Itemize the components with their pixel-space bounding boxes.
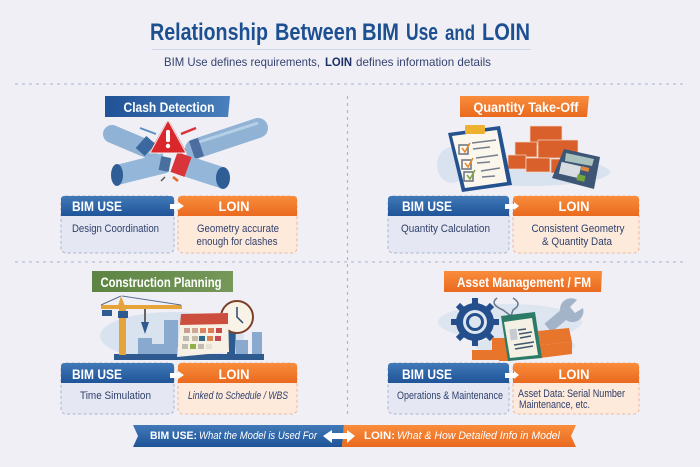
title: and bbox=[445, 22, 475, 45]
panel: asset management bbox=[388, 271, 639, 414]
ribbon: LOIN: LOIN: bbox=[364, 430, 395, 442]
icon: crane, calendar, clock bbox=[100, 296, 264, 360]
bim use card bbox=[388, 363, 509, 414]
icon: gear, tag, wrench, bricks bbox=[438, 298, 583, 361]
panel: quantity take-off bbox=[388, 96, 639, 253]
icon: checklist, bricks, calculator bbox=[437, 125, 610, 192]
double arrow bbox=[323, 430, 355, 443]
arrow bbox=[505, 202, 519, 210]
loin card: Serial Number bbox=[567, 388, 625, 400]
loin card: Linked to Schedule / WBS bbox=[188, 390, 289, 402]
loin card: Geometry accurate bbox=[197, 223, 279, 235]
loin card bbox=[513, 196, 639, 253]
ribbon: BIM USE: What the Model is Used For bbox=[199, 430, 318, 442]
loin card: Maintenance, etc. bbox=[519, 399, 590, 411]
title: Between bbox=[275, 19, 357, 46]
banner: Quantity Take-Off: Quantity Take-Off bbox=[474, 99, 579, 115]
banner: Clash Detection: Clash Detection bbox=[124, 99, 214, 115]
subtitle: LOIN bbox=[325, 55, 352, 69]
bim use card: Time Simulation bbox=[80, 390, 151, 402]
subtitle bbox=[164, 55, 491, 69]
title: Use bbox=[406, 19, 438, 46]
loin card: Consistent Geometry bbox=[532, 223, 625, 235]
bim use card: Operations & Maintenance bbox=[397, 390, 503, 402]
loin card: enough for clashes bbox=[196, 236, 278, 248]
bim use card: BIM USE bbox=[402, 366, 452, 382]
ribbon: BIM USE: BIM USE: bbox=[150, 430, 197, 442]
bim use card: BIM USE bbox=[72, 366, 122, 382]
subtitle: defines information details bbox=[356, 55, 491, 69]
banner: Asset Management / FM: Asset Management / FM bbox=[457, 274, 591, 290]
loin card: LOIN bbox=[558, 198, 590, 214]
banner: Clash Detection bbox=[105, 96, 230, 117]
title bbox=[150, 19, 530, 46]
banner: Asset Management / FM bbox=[444, 271, 602, 292]
bim use card bbox=[61, 363, 174, 414]
banner: Construction Planning bbox=[92, 271, 233, 292]
arrow bbox=[505, 371, 519, 379]
bim use card: BIM USE bbox=[72, 198, 122, 214]
bim use card: BIM USE bbox=[402, 198, 452, 214]
title: BIM bbox=[362, 19, 399, 46]
footer ribbon bbox=[133, 425, 576, 447]
loin card: Asset Data: bbox=[518, 388, 565, 400]
ribbon: BIM USE bbox=[133, 425, 344, 447]
loin card bbox=[513, 363, 639, 414]
panel: clash detection bbox=[61, 96, 297, 253]
arrow bbox=[170, 202, 184, 210]
banner: Quantity Take-Off bbox=[460, 96, 589, 117]
loin card: LOIN bbox=[558, 366, 590, 382]
loin card: LOIN bbox=[218, 366, 250, 382]
arrow bbox=[170, 371, 184, 379]
ribbon: LOIN: What & How Detailed Info in Model bbox=[397, 430, 561, 442]
bim use card bbox=[61, 196, 174, 253]
bim use card: Design Coordination bbox=[72, 223, 159, 235]
loin card: LOIN bbox=[218, 198, 250, 214]
subtitle: BIM Use defines requirements, bbox=[164, 55, 320, 69]
banner: Construction Planning: Construction Planning bbox=[100, 274, 222, 290]
title: LOIN bbox=[482, 19, 530, 46]
ribbon: LOIN bbox=[342, 425, 576, 447]
loin card bbox=[178, 363, 297, 414]
bim use card bbox=[388, 196, 509, 253]
title: Relationship bbox=[150, 19, 268, 46]
icon: clashing pipes bbox=[111, 120, 258, 189]
panel: construction planning bbox=[61, 271, 297, 414]
bim use card: Quantity Calculation bbox=[401, 223, 490, 235]
loin card bbox=[178, 196, 297, 253]
loin card: & Quantity Data bbox=[542, 236, 613, 248]
